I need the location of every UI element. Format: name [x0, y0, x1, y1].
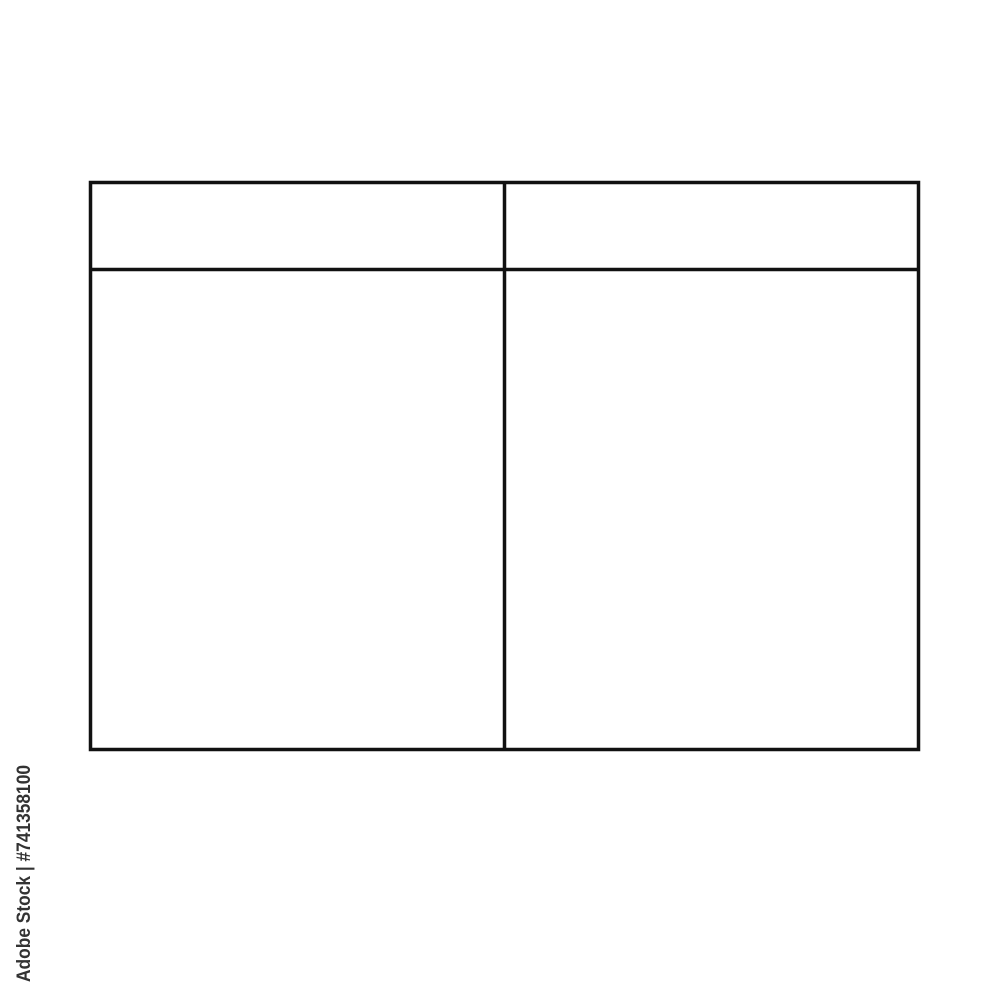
column divider — [503, 182, 506, 750]
stock id text: Adobe Stock | #741358100 — [14, 765, 35, 982]
outer frame — [90, 182, 918, 750]
header row divider — [90, 268, 919, 271]
